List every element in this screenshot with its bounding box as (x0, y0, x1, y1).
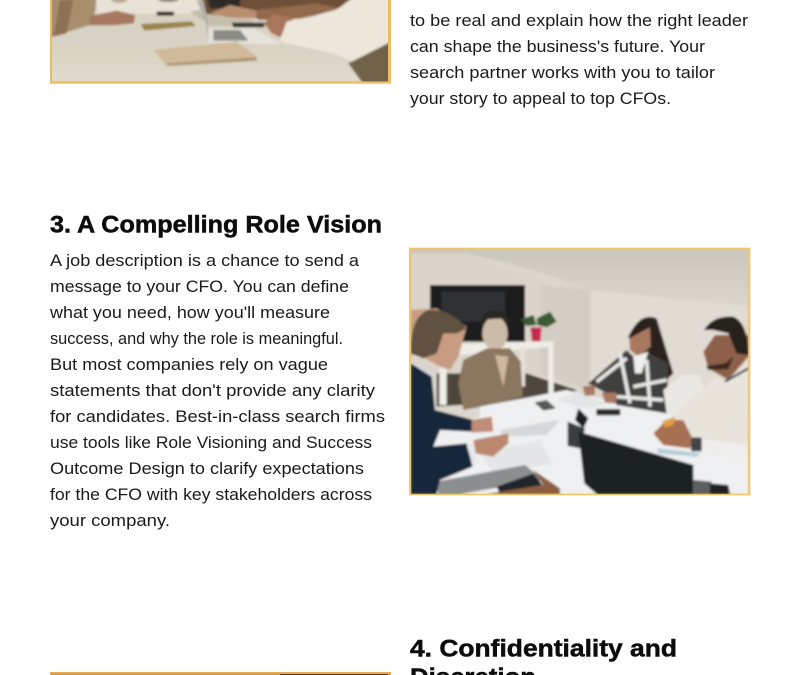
body text: section 3: your company. (50, 512, 170, 530)
body text: end of section 2: can shape the business's future. Your (410, 38, 706, 56)
man on the left (411, 308, 467, 370)
table (428, 390, 748, 494)
body text: end of section 2 (410, 12, 749, 108)
monitor (430, 285, 525, 342)
heading: section 4: 4. Confidentiality and (410, 636, 677, 662)
photo: top edge of section 4 image (50, 672, 391, 675)
body text: section 3 (49, 252, 385, 530)
body text: end of section 2: to be real and explain how the right leader (410, 12, 749, 30)
photo: team meeting around a table with laptops (50, 0, 391, 84)
body text: section 3: But most companies rely on vague (50, 356, 328, 374)
side table (460, 341, 553, 355)
pen holder (568, 422, 585, 448)
plant (530, 327, 542, 341)
body text: end of section 2: search partner works with you to tailor (410, 64, 716, 82)
heading: section 3: 3. A Compelling Role Vision (50, 212, 382, 238)
heading: section 4 (410, 636, 677, 675)
photo: four colleagues in a meeting room (409, 248, 750, 495)
body text: section 3: statements that don't provide any clarity (50, 382, 376, 400)
body text: end of section 2: your story to appeal to top CFOs. (410, 90, 671, 108)
body text: section 3: what you need, how you'll measure (49, 304, 330, 322)
body text: section 3: A job description is a chance to send a (50, 252, 360, 270)
body text: section 3: for the CFO with key stakeholders across (50, 486, 372, 504)
body text: section 3: success, and why the role is meaningful. (50, 330, 343, 348)
chair (662, 375, 704, 416)
body text: section 3: for candidates. Best-in-class search firms (50, 408, 385, 426)
woman in plaid jacket (628, 317, 673, 380)
man in white sweater (703, 335, 748, 380)
body text: section 3: use tools like Role Visioning and Success (50, 434, 372, 452)
body text: section 3: Outcome Design to clarify expectations (50, 460, 364, 478)
body text: section 3: message to your CFO. You can define (50, 278, 349, 296)
phones and notebook (534, 400, 556, 411)
woman in beige blazer (482, 317, 508, 350)
laptop (578, 432, 693, 494)
